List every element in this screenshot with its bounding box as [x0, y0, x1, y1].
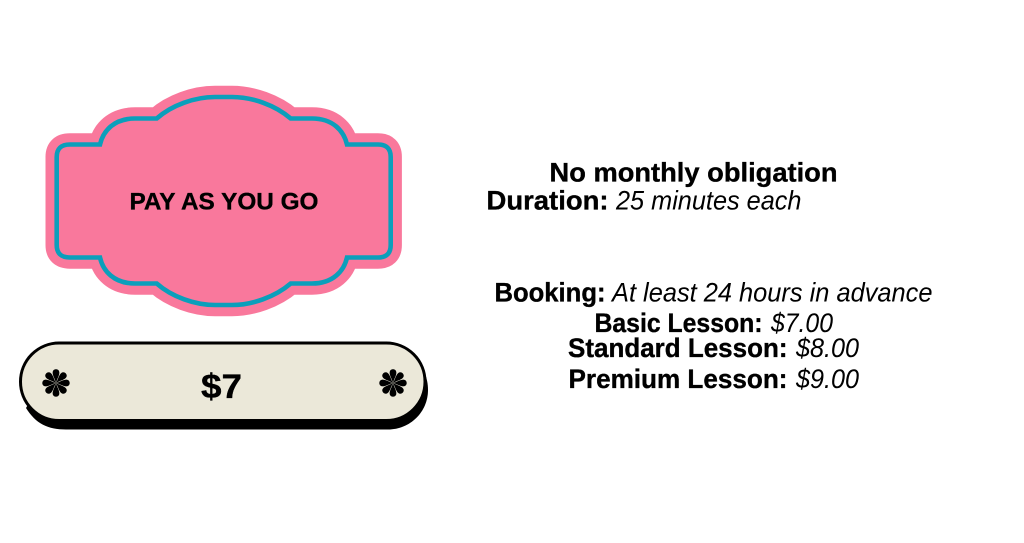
booking: At least 24 hours in advance — [610, 278, 932, 308]
premium lesson: Premium Lesson: — [568, 364, 788, 394]
icon: right flower — [379, 369, 407, 397]
standard lesson: Standard Lesson: — [568, 333, 788, 363]
badge: pay as you go — [57, 97, 391, 305]
duration — [486, 186, 802, 216]
text block: lesson details — [486, 158, 932, 394]
duration: Duration: — [486, 186, 608, 216]
basic lesson: Basic Lesson: — [594, 308, 762, 338]
price: $7 — [201, 368, 242, 406]
price pill — [20, 343, 428, 430]
standard lesson: $8.00 — [795, 333, 859, 363]
icon: left flower — [42, 369, 70, 397]
basic lesson: $7.00 — [770, 308, 833, 338]
duration: 25 minutes each — [615, 186, 802, 216]
heading: no monthly obligation: No monthly obligation — [550, 158, 838, 188]
booking: Booking: — [494, 278, 606, 308]
badge title: PAY AS YOU GO — [130, 189, 318, 216]
premium lesson: $9.00 — [795, 364, 859, 394]
